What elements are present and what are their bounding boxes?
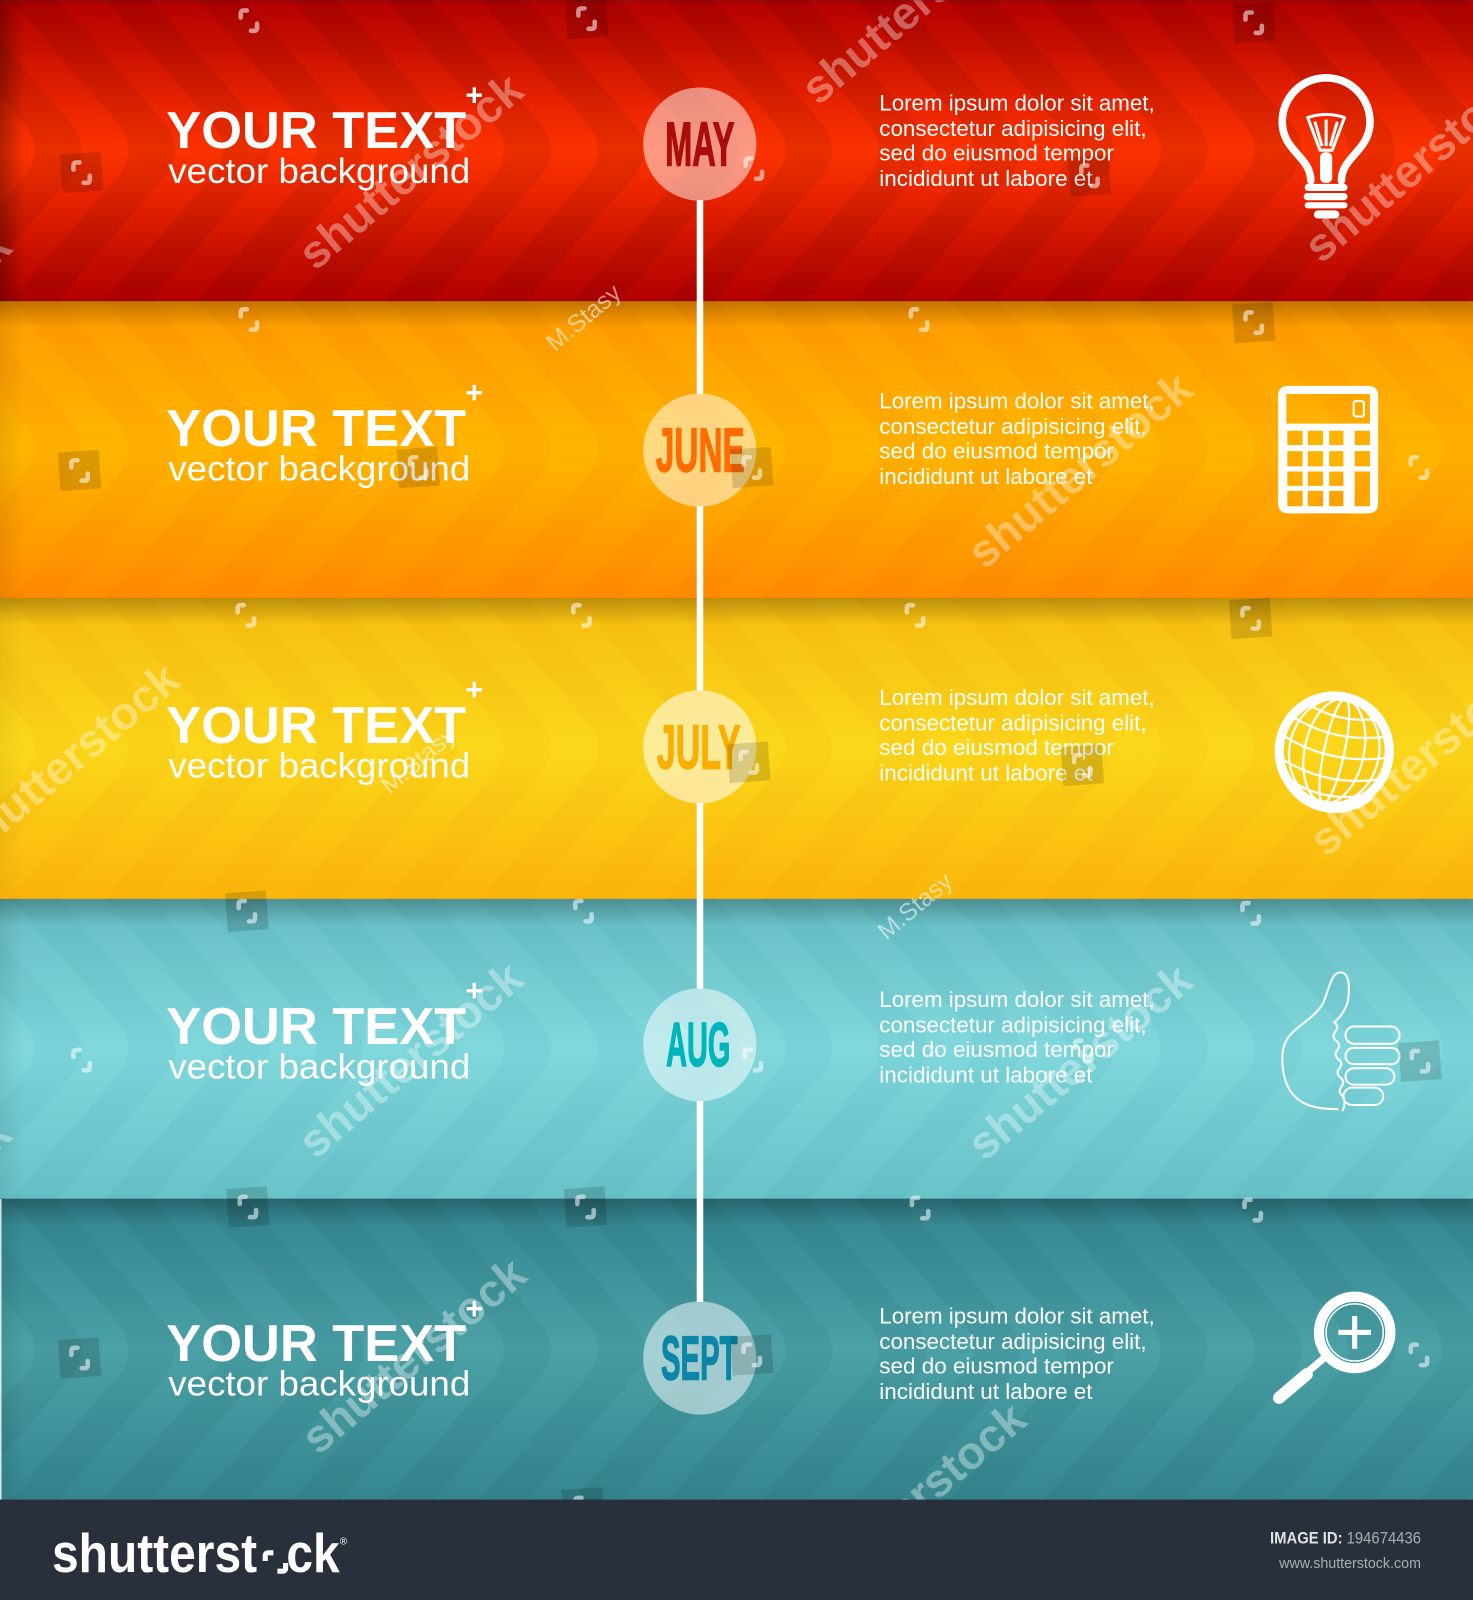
text block: July: Lorem ipsum dolor sit amet,	[879, 685, 1155, 710]
month marker: JUNE: JUNE	[656, 417, 745, 486]
panel: June band	[0, 296, 1473, 602]
heading: June: +	[465, 376, 483, 410]
text block: August	[879, 987, 1155, 1088]
month marker: JUNE	[643, 393, 756, 507]
text block: August: incididunt ut labore et	[879, 1063, 1093, 1088]
text block: June: sed do eiusmod tempor	[879, 438, 1114, 463]
heading: May: +	[465, 78, 483, 112]
heading: July: +	[465, 673, 483, 707]
panel: August band	[0, 896, 1473, 1202]
text block: May: incididunt ut labore et	[879, 166, 1093, 191]
text block: June: consectetur adipisicing elit,	[879, 414, 1147, 439]
panel: July band	[0, 595, 1473, 901]
heading: August: +	[465, 974, 483, 1008]
footer bar	[0, 1500, 1473, 1600]
icon: magnifier	[1279, 1297, 1390, 1398]
text block: July: sed do eiusmod tempor	[879, 735, 1114, 760]
icon: globe	[1272, 688, 1396, 814]
heading: May: vector background	[168, 152, 470, 191]
month marker: MAY	[643, 87, 756, 201]
month marker: JULY: JULY	[657, 713, 741, 782]
month marker: JULY	[643, 690, 756, 804]
month marker: SEPT	[643, 1301, 756, 1415]
watermark overlays: shutterstock	[957, 361, 1202, 578]
month marker: MAY: MAY	[665, 111, 734, 180]
icon: thumbs up	[1282, 972, 1400, 1111]
text block: September: Lorem ipsum dolor sit amet,	[879, 1303, 1155, 1328]
heading: July: YOUR TEXT	[166, 697, 466, 755]
heading: June: vector background	[168, 450, 470, 489]
watermark overlays: M.Stasy	[376, 721, 462, 799]
heading: September: YOUR TEXT	[166, 1315, 466, 1373]
registered mark: ®	[340, 1537, 348, 1548]
text block: June	[879, 388, 1155, 489]
heading: June	[166, 376, 483, 489]
heading: May: YOUR TEXT	[166, 102, 466, 160]
text block: May: consectetur adipisicing elit,	[879, 116, 1147, 141]
watermark overlays: shutterstock	[288, 951, 533, 1168]
heading: September	[166, 1292, 483, 1404]
footer logo: shutterstock	[52, 1522, 340, 1584]
text block: August: consectetur adipisicing elit,	[879, 1013, 1147, 1038]
text block: May: Lorem ipsum dolor sit amet,	[879, 90, 1155, 115]
watermark overlays: M.Stasy	[541, 279, 627, 357]
website: www.shutterstock.com	[1278, 1556, 1421, 1572]
text block: July: consectetur adipisicing elit,	[879, 711, 1147, 736]
text block: May: sed do eiusmod tempor	[879, 140, 1114, 165]
month marker: AUG: AUG	[666, 1011, 730, 1080]
heading: July: vector background	[168, 747, 470, 786]
text block: June: Lorem ipsum dolor sit amet,	[879, 388, 1155, 413]
heading: August: vector background	[168, 1047, 470, 1086]
heading: September: vector background	[168, 1365, 470, 1404]
heading: August: YOUR TEXT	[166, 998, 466, 1056]
month marker: SEPT: SEPT	[661, 1324, 738, 1393]
heading: May	[166, 78, 483, 191]
text block: July	[879, 685, 1155, 786]
heading: September: +	[465, 1292, 483, 1326]
text block: June: incididunt ut labore et	[879, 464, 1093, 489]
month marker: AUG	[643, 988, 756, 1101]
text block: September: consectetur adipisicing elit,	[879, 1329, 1147, 1354]
heading: June: YOUR TEXT	[166, 400, 466, 458]
text block: September	[879, 1303, 1155, 1404]
heading: July	[166, 673, 483, 786]
panel: May band	[0, 0, 1473, 303]
watermark overlays: shutterstock	[957, 953, 1202, 1170]
text block: August: sed do eiusmod tempor	[879, 1037, 1114, 1062]
text block: September: sed do eiusmod tempor	[879, 1353, 1114, 1378]
icon: light bulb	[1282, 78, 1370, 219]
text block: August: Lorem ipsum dolor sit amet,	[879, 987, 1155, 1012]
text block: September: incididunt ut labore et	[879, 1379, 1093, 1404]
watermark overlays: shutterstock	[291, 1246, 536, 1464]
watermark overlays: shutterstock	[288, 62, 533, 279]
heading: August	[166, 974, 483, 1086]
watermark overlays: M.Stasy	[873, 867, 959, 945]
text block: July: incididunt ut labore et	[879, 761, 1093, 786]
text block: May	[879, 90, 1155, 191]
image id: IMAGE ID: 194674436	[1270, 1530, 1421, 1548]
icon: calculator	[1278, 386, 1378, 513]
timeline vertical line	[697, 200, 703, 1302]
panel: September band	[0, 1197, 1473, 1503]
